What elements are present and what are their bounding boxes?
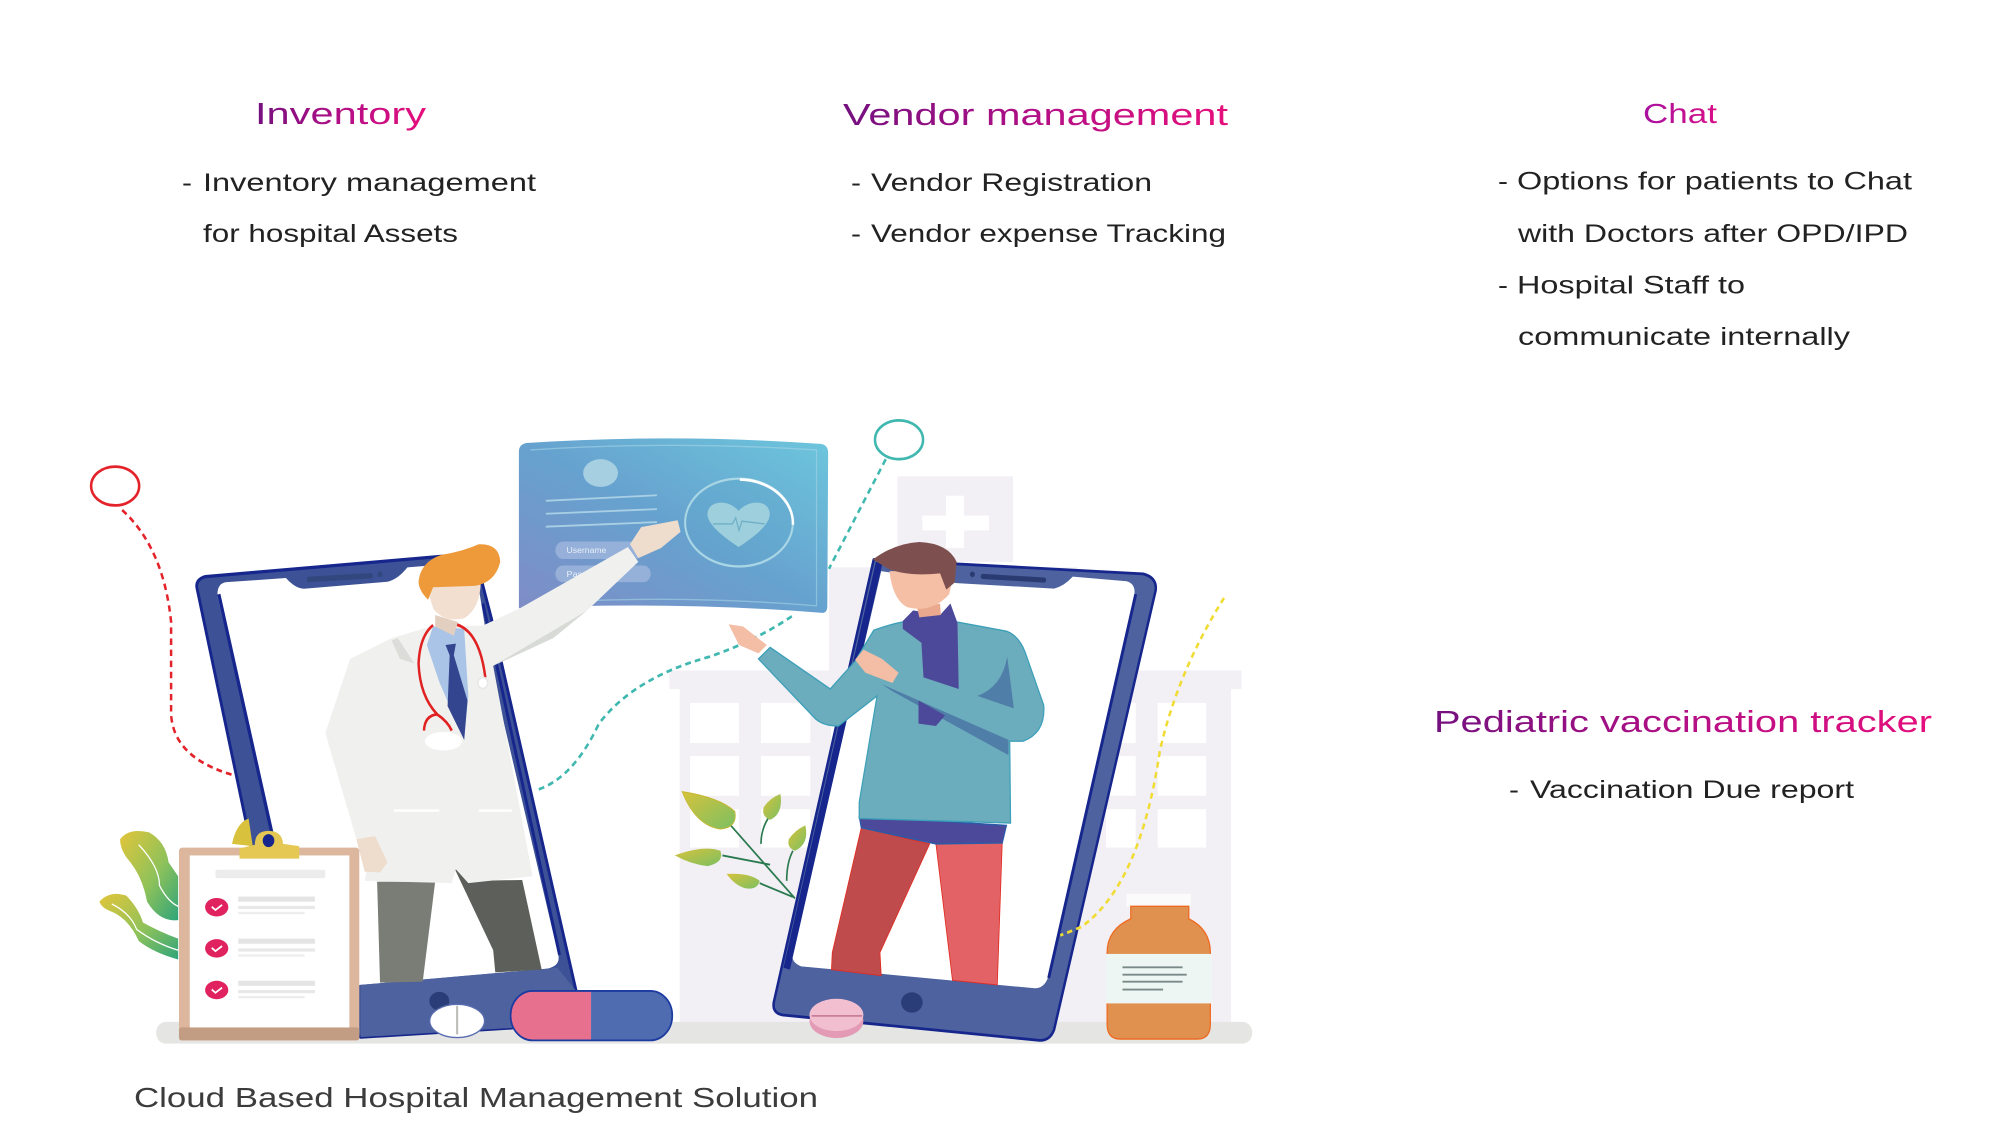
heading: inventory: Inventory (255, 96, 427, 131)
text block: vendor details: - (851, 220, 861, 248)
dashed path: red (91, 467, 255, 780)
doctor (325, 520, 681, 983)
head (419, 544, 500, 636)
text block: inventory details: Inventory management (203, 169, 536, 197)
pill: pink tablet (809, 999, 863, 1038)
shirt and tie (427, 627, 468, 740)
clip (239, 831, 299, 859)
trousers (831, 828, 1002, 985)
text block: chat details: - (1498, 168, 1508, 196)
text block: chat details: - (1498, 272, 1508, 300)
scarf (903, 603, 959, 726)
left phone (197, 554, 576, 1037)
pill: capsule (510, 991, 672, 1040)
panel: vendor management (843, 97, 1229, 248)
hospital building (669, 476, 1241, 1024)
leaves: left (99, 818, 253, 959)
plant: right (675, 792, 806, 898)
pill: password: Password (567, 570, 606, 579)
panel: inventory (182, 96, 536, 248)
sweater (758, 622, 1044, 823)
heading: vendor management: Vendor management (843, 97, 1229, 132)
text block: vendor details (851, 169, 1226, 248)
text block: chat details: Hospital Staff to (1517, 272, 1745, 300)
pill: password (555, 566, 651, 582)
pill: username: Username (567, 546, 607, 555)
heading: chat: Chat (1643, 98, 1717, 129)
panel: chat (1498, 98, 1912, 351)
text block: vendor details: Vendor Registration (871, 169, 1152, 197)
text block: inventory details: for hospital Assets (203, 220, 458, 248)
checklist item 3 (205, 981, 315, 999)
text block: vaccination details: Vaccination Due report (1530, 776, 1854, 804)
text block: vendor details: - (851, 169, 861, 197)
pill: white tablet (430, 1004, 484, 1038)
caption: Cloud Based Hospital Management Solution (134, 1082, 818, 1113)
checklist item 1 (205, 897, 315, 916)
ground shadow (156, 1022, 1252, 1044)
text block: vendor details: Vendor expense Tracking (871, 220, 1226, 248)
icon: heart monitor (685, 479, 793, 566)
medicine bottle (1106, 894, 1212, 1039)
text block: chat details: with Doctors after OPD/IPD (1517, 220, 1908, 248)
hands (356, 520, 681, 873)
waistband (859, 816, 1006, 844)
trousers (377, 857, 542, 983)
dashed path: yellow (1060, 598, 1224, 935)
text block: vaccination details: - (1509, 776, 1519, 804)
head (873, 542, 957, 617)
hands (729, 624, 899, 683)
checklist item 2 (205, 939, 315, 958)
pill: username (555, 541, 642, 559)
text block: inventory details: - (182, 169, 192, 197)
lab coat (325, 547, 638, 883)
screen: medical dashboard (519, 438, 828, 613)
illustration: doctor and patient on phones (91, 420, 1252, 1044)
dashed path: teal (539, 420, 923, 789)
text block: inventory details (182, 169, 536, 248)
panel: pediatric vaccination tracker (1434, 704, 1932, 804)
text block: chat details (1498, 168, 1912, 351)
clipboard (179, 831, 359, 1040)
heading: pediatric vaccination tracker: Pediatric vaccination tracker (1434, 704, 1932, 739)
stethoscope (419, 624, 488, 750)
text block: chat details: communicate internally (1518, 323, 1851, 351)
right phone (774, 560, 1156, 1040)
text block: chat details: Options for patients to Chat (1517, 168, 1912, 196)
patient (729, 542, 1044, 985)
